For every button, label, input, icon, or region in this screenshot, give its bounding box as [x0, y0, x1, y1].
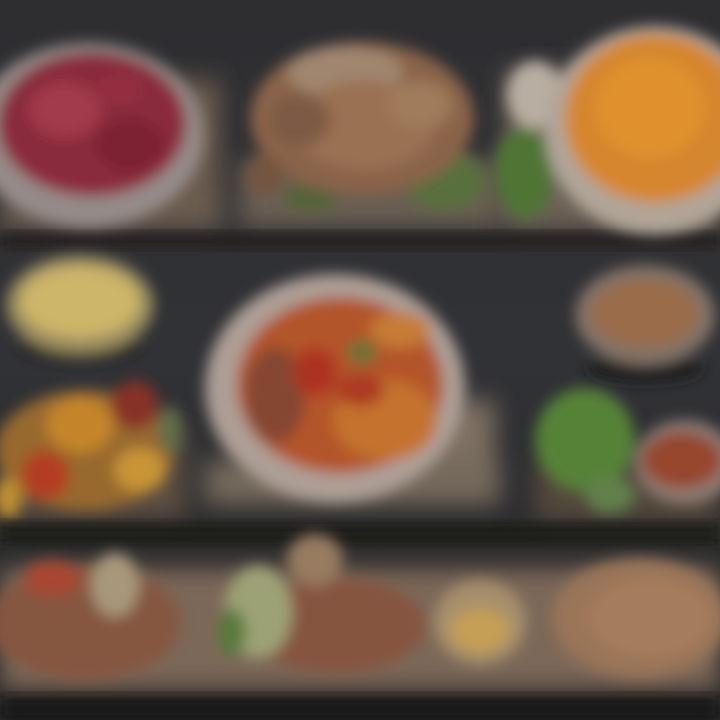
middle center plate: red orange dish	[205, 274, 465, 502]
lower right: green vegetable and red sauce bowl	[535, 388, 720, 513]
top right bowl: orange food	[495, 26, 720, 234]
bottom row dishes	[0, 534, 720, 680]
middle left bowl: yellow	[6, 255, 154, 359]
middle right bowl: brown sauce	[575, 265, 715, 382]
bottom row: tray	[0, 568, 720, 690]
dark shelf band under middle row	[0, 524, 720, 544]
dark shelf band under top row	[0, 233, 720, 248]
top row: placemats	[0, 70, 720, 230]
top left bowl: red meat	[0, 43, 204, 227]
bottom dark edge	[0, 698, 720, 720]
top center: chicken pile with greens	[247, 42, 485, 212]
lower left: colorful vegetables	[0, 381, 182, 518]
middle row: mats	[0, 400, 720, 520]
